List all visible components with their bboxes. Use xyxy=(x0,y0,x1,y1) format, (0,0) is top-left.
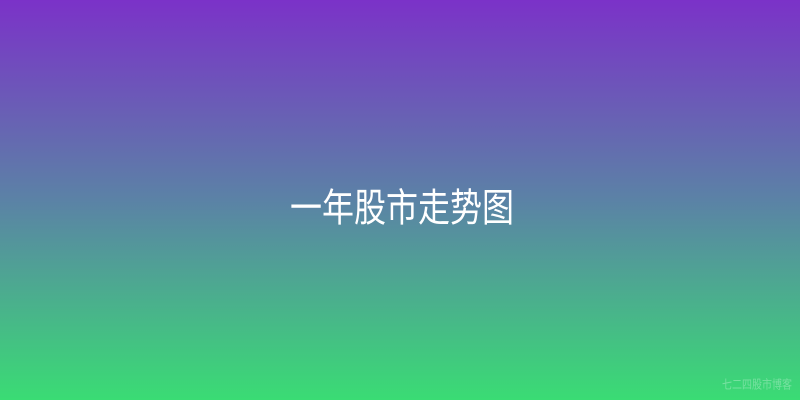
title: 一年股市走势图 xyxy=(290,186,514,230)
watermark: 七二四股市博客 xyxy=(722,379,792,392)
